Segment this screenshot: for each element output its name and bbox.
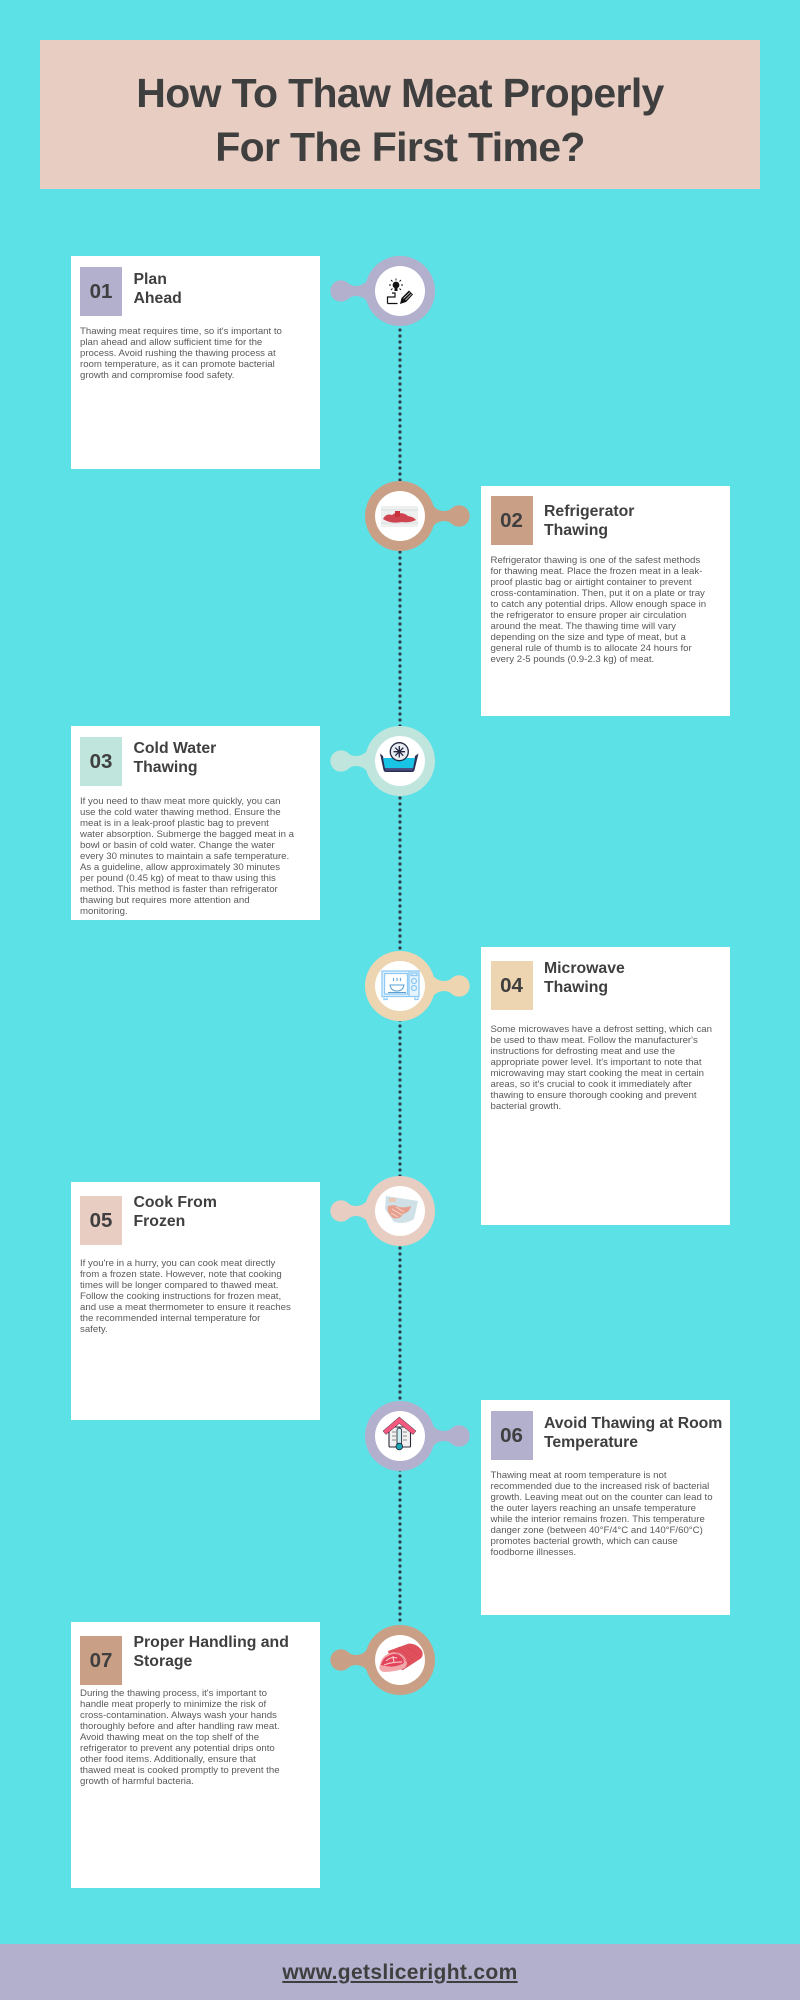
heading bbox=[544, 1414, 722, 1450]
text block: Avoid thawing meat on the top shelf of the bbox=[80, 1732, 259, 1743]
number 06: 06 bbox=[500, 1424, 523, 1447]
text block: times will be longer compared to thawed meat. bbox=[80, 1280, 278, 1291]
number 02 bbox=[490, 496, 532, 545]
text block: cross-contamination. Then, put it on a plate or tray bbox=[490, 588, 705, 599]
text block: growth of harmful bacteria. bbox=[80, 1776, 194, 1787]
heading bbox=[544, 960, 625, 996]
text block: the refrigerator to ensure proper air circulation bbox=[490, 610, 686, 621]
text block bbox=[490, 555, 706, 665]
text block bbox=[80, 326, 282, 381]
text block: thawing to ensure thorough cooking and prevent bbox=[490, 1090, 697, 1101]
ring 04: microwave icon bbox=[365, 951, 470, 1021]
panel: 03 cold water thawing bbox=[70, 726, 320, 920]
text block: thawing but requires more attention and bbox=[80, 895, 250, 906]
text block: depending on the size and type of meat, but a bbox=[490, 632, 686, 643]
text block bbox=[80, 796, 294, 917]
text block: thoroughly before and after handling raw meat. bbox=[80, 1721, 280, 1732]
text block: and use a meat thermometer to ensure it reaches bbox=[80, 1302, 291, 1313]
heading: Refrigerator bbox=[544, 502, 634, 520]
title bbox=[136, 70, 664, 170]
text block: microwaving may start cooking the meat in certain bbox=[490, 1068, 704, 1079]
text block: instructions for defrosting meat and use the bbox=[490, 1046, 675, 1057]
number 03: 03 bbox=[90, 750, 112, 773]
text block: refrigerator to prevent any potential drips onto bbox=[80, 1743, 275, 1754]
number 02: 02 bbox=[500, 509, 523, 532]
text block: bacterial growth. bbox=[490, 1101, 561, 1112]
panel: 06 avoid thawing at room temperature bbox=[481, 1400, 730, 1615]
heading: Thawing bbox=[544, 522, 608, 538]
text block: every 30 minutes to maintain a safe temperature. bbox=[80, 851, 289, 862]
text block: other food items. Additionally, ensure that bbox=[80, 1754, 256, 1765]
heading: Temperature bbox=[544, 1434, 638, 1450]
title: How To Thaw Meat Properly bbox=[136, 70, 664, 116]
text block: growth. Leaving meat out on the counter can lead to bbox=[490, 1492, 713, 1503]
text block: danger zone (between 40°F/4°C and 140°F/60°C) bbox=[490, 1525, 703, 1536]
text block: thawed meat is cooked promptly to prevent the bbox=[80, 1765, 280, 1776]
number 05 bbox=[80, 1196, 122, 1245]
heading: Cold Water bbox=[134, 740, 216, 756]
text block: general rule of thumb is to allocate 24 hours for bbox=[490, 643, 692, 654]
heading: Storage bbox=[134, 1652, 192, 1670]
text block: to catch any potential drips. Allow enough space in bbox=[490, 599, 706, 610]
text block: As a guideline, allow approximately 30 minutes bbox=[80, 862, 280, 873]
text block: per pound (0.45 kg) of meat to thaw using this bbox=[80, 873, 276, 884]
heading: Frozen bbox=[134, 1212, 185, 1230]
text block: Thawing meat at room temperature is not bbox=[490, 1470, 667, 1481]
text block: room temperature, as it can promote bacterial bbox=[80, 359, 275, 370]
title banner bbox=[40, 40, 760, 189]
text block: plan ahead and allow sufficient time for the bbox=[80, 337, 262, 348]
number 07: 07 bbox=[90, 1649, 112, 1672]
heading bbox=[134, 270, 182, 306]
text block bbox=[490, 1024, 712, 1112]
heading bbox=[134, 1634, 289, 1670]
text block: Some microwaves have a defrost setting, which can bbox=[490, 1024, 712, 1035]
panel: 07 proper handling and storage bbox=[70, 1622, 320, 1888]
number 03 bbox=[80, 737, 122, 786]
text block: from a frozen state. However, note that cooking bbox=[80, 1269, 282, 1280]
ring 06: house thermometer icon bbox=[365, 1401, 470, 1471]
text block: If you're in a hurry, you can cook meat directly bbox=[80, 1258, 275, 1269]
text block: for thawing meat. Place the frozen meat in a leak- bbox=[490, 566, 702, 577]
heading: Plan bbox=[134, 270, 167, 288]
text block: cross-contamination. Always wash your hands bbox=[80, 1710, 277, 1721]
text block bbox=[80, 1258, 291, 1335]
text block: every 2-5 pounds (0.9-2.3 kg) of meat. bbox=[490, 654, 654, 665]
text block: use the cold water thawing method. Ensure the bbox=[80, 807, 281, 818]
ring 05: frozen meat package icon bbox=[330, 1176, 435, 1246]
text block: promotes bacterial growth, which can cause bbox=[490, 1536, 678, 1547]
panel: 02 refrigerator thawing bbox=[481, 486, 730, 716]
heading: Cook From bbox=[134, 1194, 217, 1210]
text block: bowl or basin of cold water. Change the water bbox=[80, 840, 275, 851]
number 06 bbox=[490, 1411, 532, 1460]
text block: around the meat. The thawing time will vary bbox=[490, 621, 676, 632]
text block: Refrigerator thawing is one of the safest methods bbox=[490, 555, 700, 566]
text block: while the interior remains frozen. This temperature bbox=[490, 1514, 705, 1525]
text block: process. Avoid rushing the thawing process at bbox=[80, 348, 276, 359]
heading bbox=[134, 1194, 217, 1230]
heading: Thawing bbox=[134, 758, 198, 776]
text block bbox=[80, 1688, 280, 1787]
panel: 01 plan ahead bbox=[70, 256, 320, 469]
text block: recommended due to the increased risk of bacterial bbox=[490, 1481, 709, 1492]
text block: the outer layers reaching an unsafe temperature bbox=[490, 1503, 696, 1514]
text block: If you need to thaw meat more quickly, you can bbox=[80, 796, 280, 807]
text block: be used to thaw meat. Follow the manufacturer's bbox=[490, 1035, 698, 1046]
text block: growth and compromise food safety. bbox=[80, 370, 234, 381]
heading: Microwave bbox=[544, 960, 625, 976]
panel: 05 cook from frozen bbox=[70, 1182, 320, 1420]
text block: foodborne illnesses. bbox=[490, 1547, 576, 1558]
text block: During the thawing process, it's important to bbox=[80, 1688, 267, 1699]
text block: appropriate power level. It's important to note that bbox=[490, 1057, 702, 1068]
number 04 bbox=[490, 961, 532, 1010]
heading: Thawing bbox=[544, 978, 608, 996]
text block: meat is in a leak-proof plastic bag to prevent bbox=[80, 818, 269, 829]
number 01: 01 bbox=[90, 280, 112, 303]
text block: safety. bbox=[80, 1324, 108, 1335]
panel: 04 microwave thawing bbox=[481, 947, 730, 1225]
heading: Ahead bbox=[134, 290, 182, 306]
text block: water absorption. Submerge the bagged meat in a bbox=[80, 829, 294, 840]
text block: Thawing meat requires time, so it's important to bbox=[80, 326, 282, 337]
text block: proof plastic bag or airtight container to prevent bbox=[490, 577, 692, 588]
website url: www.getsliceright.com bbox=[282, 1961, 518, 1984]
footer band bbox=[0, 1944, 800, 2000]
text block: monitoring. bbox=[80, 906, 128, 917]
text block: method. This method is faster than refrigerator bbox=[80, 884, 278, 895]
number 07 bbox=[80, 1636, 122, 1685]
heading: Proper Handling and bbox=[134, 1634, 289, 1650]
ring 02: refrigerator meat icon bbox=[365, 481, 470, 551]
number 05: 05 bbox=[90, 1209, 112, 1232]
heading bbox=[134, 740, 216, 776]
heading: Avoid Thawing at Room bbox=[544, 1414, 722, 1432]
text block: the recommended internal temperature for bbox=[80, 1313, 260, 1324]
text block: handle meat properly to minimize the risk of bbox=[80, 1699, 266, 1710]
text block bbox=[490, 1470, 713, 1558]
number 04: 04 bbox=[500, 974, 523, 997]
title: For The First Time? bbox=[215, 124, 585, 170]
ring 03: cold water icon bbox=[330, 726, 435, 796]
text block: Follow the cooking instructions for frozen meat, bbox=[80, 1291, 281, 1302]
ring 01: plan icon bbox=[330, 256, 435, 326]
text block: areas, so it's crucial to cook it immediately after bbox=[490, 1079, 692, 1090]
heading bbox=[544, 502, 634, 538]
ring 07: meat icon bbox=[330, 1625, 435, 1695]
number 01 bbox=[80, 267, 122, 316]
